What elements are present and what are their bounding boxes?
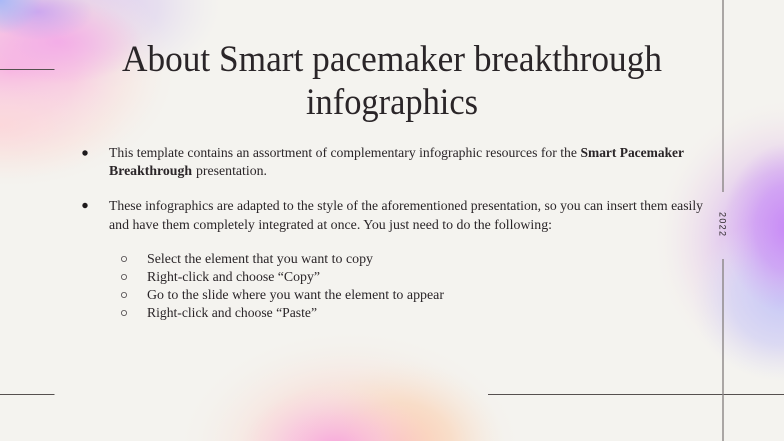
bullet: adapted style description <box>82 199 703 233</box>
year label: 2022 <box>718 212 728 236</box>
sub-list: steps: Right-click and choose “Paste” <box>147 306 317 321</box>
bullet: adapted style description: These infographics are adapted to the style of the aforementioned presentation, so you can insert them easily <box>109 199 703 214</box>
bullet: template description: Smart Pacemaker <box>580 146 684 161</box>
bullet: adapted style description: and have them completely integrated at once. You just need to do the following: <box>109 218 552 233</box>
sub-list: steps: Right-click and choose “Copy” <box>147 270 320 285</box>
sub-list: steps: Select the element that you want to copy <box>147 252 373 267</box>
bullet: template description: Breakthrough <box>109 164 192 179</box>
gradient blob: bottom <box>170 320 520 441</box>
bullet: template description: This template contains an assortment of complementary infographic resources for the <box>109 146 577 161</box>
decorative frame lines <box>0 70 784 394</box>
title: infographics <box>306 82 478 123</box>
gradient blob: right <box>640 90 784 390</box>
title: About Smart pacemaker breakthrough <box>122 39 662 80</box>
sub-list: steps: Go to the slide where you want the element to appear <box>147 288 444 303</box>
gradient blob: top left <box>0 0 230 195</box>
sub-list: steps <box>121 252 444 321</box>
title <box>122 39 662 123</box>
bullet: template description <box>82 146 684 179</box>
bullet: template description: presentation. <box>196 164 267 179</box>
